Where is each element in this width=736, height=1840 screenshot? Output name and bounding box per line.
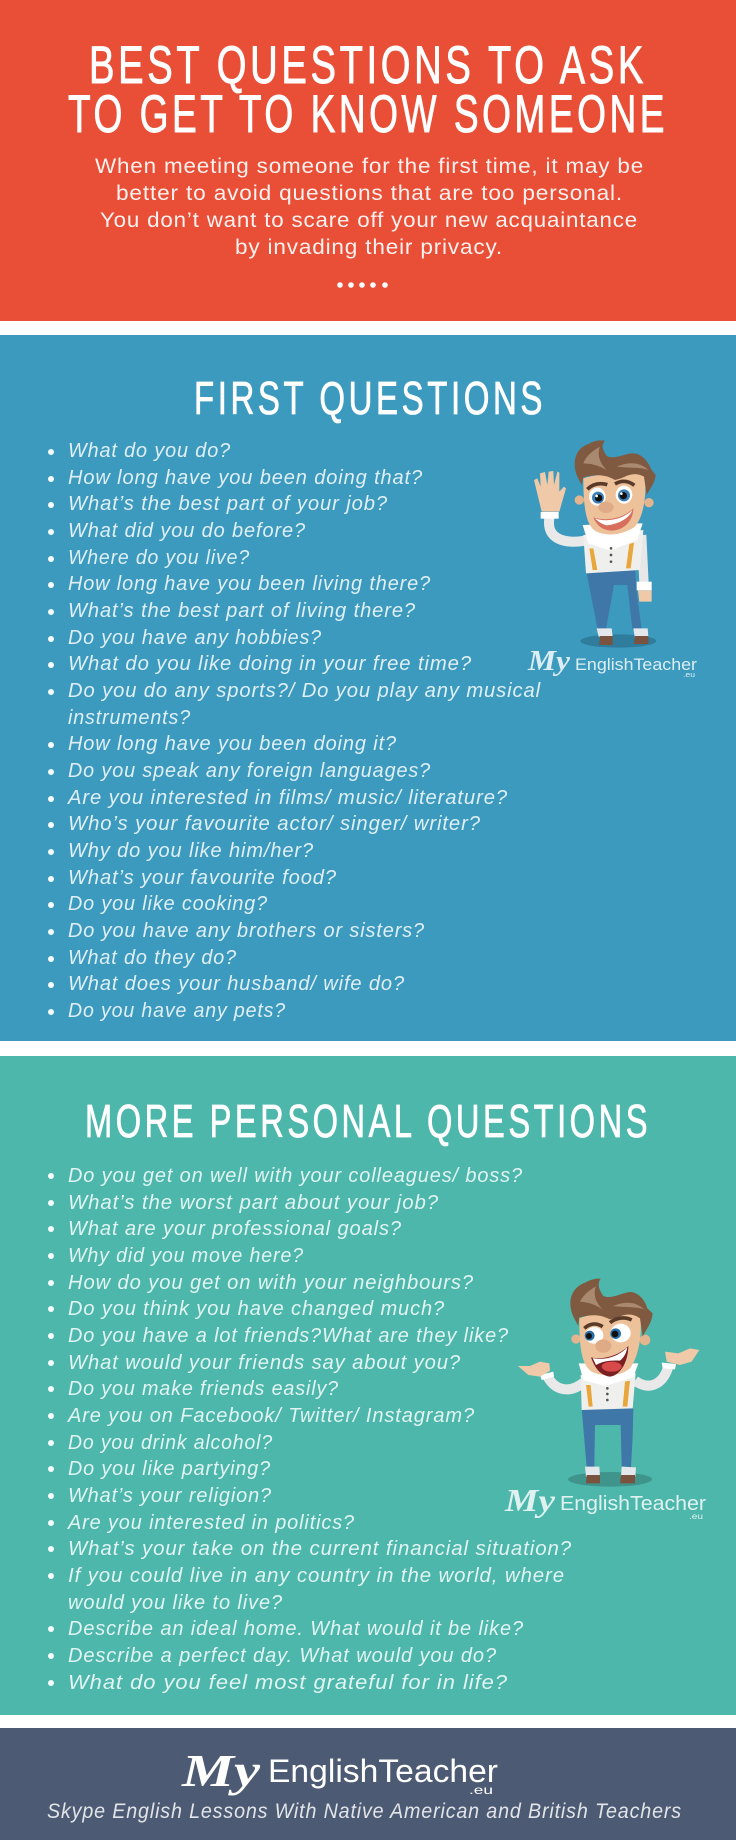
question list: more personal questions: Are you interested in politics?: [66, 1511, 355, 1534]
question list: first questions: What do you do?: [68, 439, 231, 462]
question list: first questions: What’s the best part of living there?: [68, 599, 416, 622]
question list: first questions: How long have you been doing it?: [68, 732, 397, 755]
question list: first questions: What did you do before?: [68, 519, 306, 542]
logo: first section: EnglishTeacher: [575, 655, 697, 674]
character: waving teacher: [534, 440, 656, 648]
title: [68, 36, 668, 144]
question list: first questions: Do you have any hobbies?: [68, 626, 322, 649]
logo: first section: [527, 646, 697, 679]
question list: first questions: How long have you been doing that?: [68, 466, 423, 489]
question list: first questions: Do you have any brothers or sisters?: [68, 919, 425, 942]
question list: first questions: Do you do any sports?/ Do you play any musical: [68, 679, 542, 702]
question list: first questions: Are you interested in films/ music/ literature?: [66, 786, 508, 809]
logo: second section: EnglishTeacher: [560, 1493, 706, 1515]
question list: more personal questions: Why did you move here?: [68, 1244, 304, 1267]
intro text: [95, 154, 644, 259]
question list: first questions: How long have you been living there?: [68, 572, 431, 595]
question list: more personal questions: Are you on Facebook/ Twitter/ Instagram?: [66, 1404, 475, 1427]
intro text: better to avoid questions that are too personal.: [116, 181, 623, 205]
question list: first questions: Why do you like him/her?: [68, 839, 314, 862]
intro text: by invading their privacy.: [235, 235, 503, 259]
question list: more personal questions: Do you get on well with your colleagues/ boss?: [68, 1164, 523, 1187]
question list: more personal questions: Do you have a lot friends?What are they like?: [68, 1324, 509, 1347]
intro text: You don’t want to scare off your new acquaintance: [100, 208, 638, 232]
logo: second section: .eu: [689, 1512, 703, 1521]
intro text: When meeting someone for the first time, it may be: [95, 154, 644, 178]
question list: more personal questions: What’s the worst part about your job?: [68, 1191, 439, 1214]
question list: first questions: What’s the best part of your job?: [68, 492, 388, 515]
question list: first questions: Do you have any pets?: [68, 999, 286, 1022]
question list: first questions: [48, 439, 542, 1022]
footer tagline: Skype English Lessons With Native American and British Teachers: [47, 1800, 682, 1823]
question list: more personal questions: Do you think you have changed much?: [68, 1297, 445, 1320]
question list: more personal questions: [48, 1164, 572, 1694]
question list: more personal questions: Do you make friends easily?: [68, 1377, 339, 1400]
question list: more personal questions: What do you feel most grateful for in life?: [68, 1671, 508, 1694]
question list: first questions: instruments?: [68, 706, 191, 729]
question list: more personal questions: What are your professional goals?: [68, 1217, 402, 1240]
logo: second section: My: [504, 1482, 556, 1518]
footer logo: EnglishTeacher: [268, 1753, 498, 1789]
panel: header: [0, 0, 736, 321]
question list: first questions: Do you speak any foreign languages?: [68, 759, 431, 782]
question list: first questions: Do you like cooking?: [68, 892, 268, 915]
character: shrugging teacher: [518, 1279, 699, 1487]
logo: second section: [504, 1482, 706, 1521]
question list: more personal questions: would you like to live?: [68, 1591, 283, 1614]
question list: first questions: What does your husband/ wife do?: [68, 972, 405, 995]
question list: first questions: What do you like doing in your free time?: [68, 652, 472, 675]
question list: more personal questions: Do you drink alcohol?: [68, 1431, 273, 1454]
heading: first questions: FIRST QUESTIONS: [194, 372, 546, 424]
question list: first questions: Who’s your favourite actor/ singer/ writer?: [68, 812, 481, 835]
panel: more personal questions: [0, 1056, 736, 1715]
question list: first questions: Where do you live?: [68, 546, 250, 569]
logo: first section: .eu: [683, 672, 695, 679]
question list: more personal questions: If you could live in any country in the world, where: [68, 1564, 565, 1587]
dots: [337, 282, 388, 288]
question list: more personal questions: What would your friends say about you?: [68, 1351, 461, 1374]
question list: first questions: What’s your favourite food?: [68, 866, 337, 889]
logo: first section: My: [527, 646, 571, 677]
question list: first questions: What do they do?: [68, 946, 237, 969]
question list: more personal questions: Describe a perfect day. What would you do?: [68, 1644, 497, 1667]
panel: footer: [0, 1728, 736, 1840]
question list: more personal questions: What’s your take on the current financial situation?: [68, 1537, 572, 1560]
panel: first questions: [0, 335, 736, 1041]
footer logo: [181, 1745, 498, 1797]
question list: more personal questions: Describe an ideal home. What would it be like?: [68, 1617, 524, 1640]
question list: more personal questions: Do you like partying?: [68, 1457, 271, 1480]
question list: more personal questions: How do you get on with your neighbours?: [68, 1271, 474, 1294]
footer logo: .eu: [469, 1783, 493, 1797]
question list: more personal questions: What’s your religion?: [68, 1484, 272, 1507]
footer logo: My: [181, 1745, 261, 1796]
